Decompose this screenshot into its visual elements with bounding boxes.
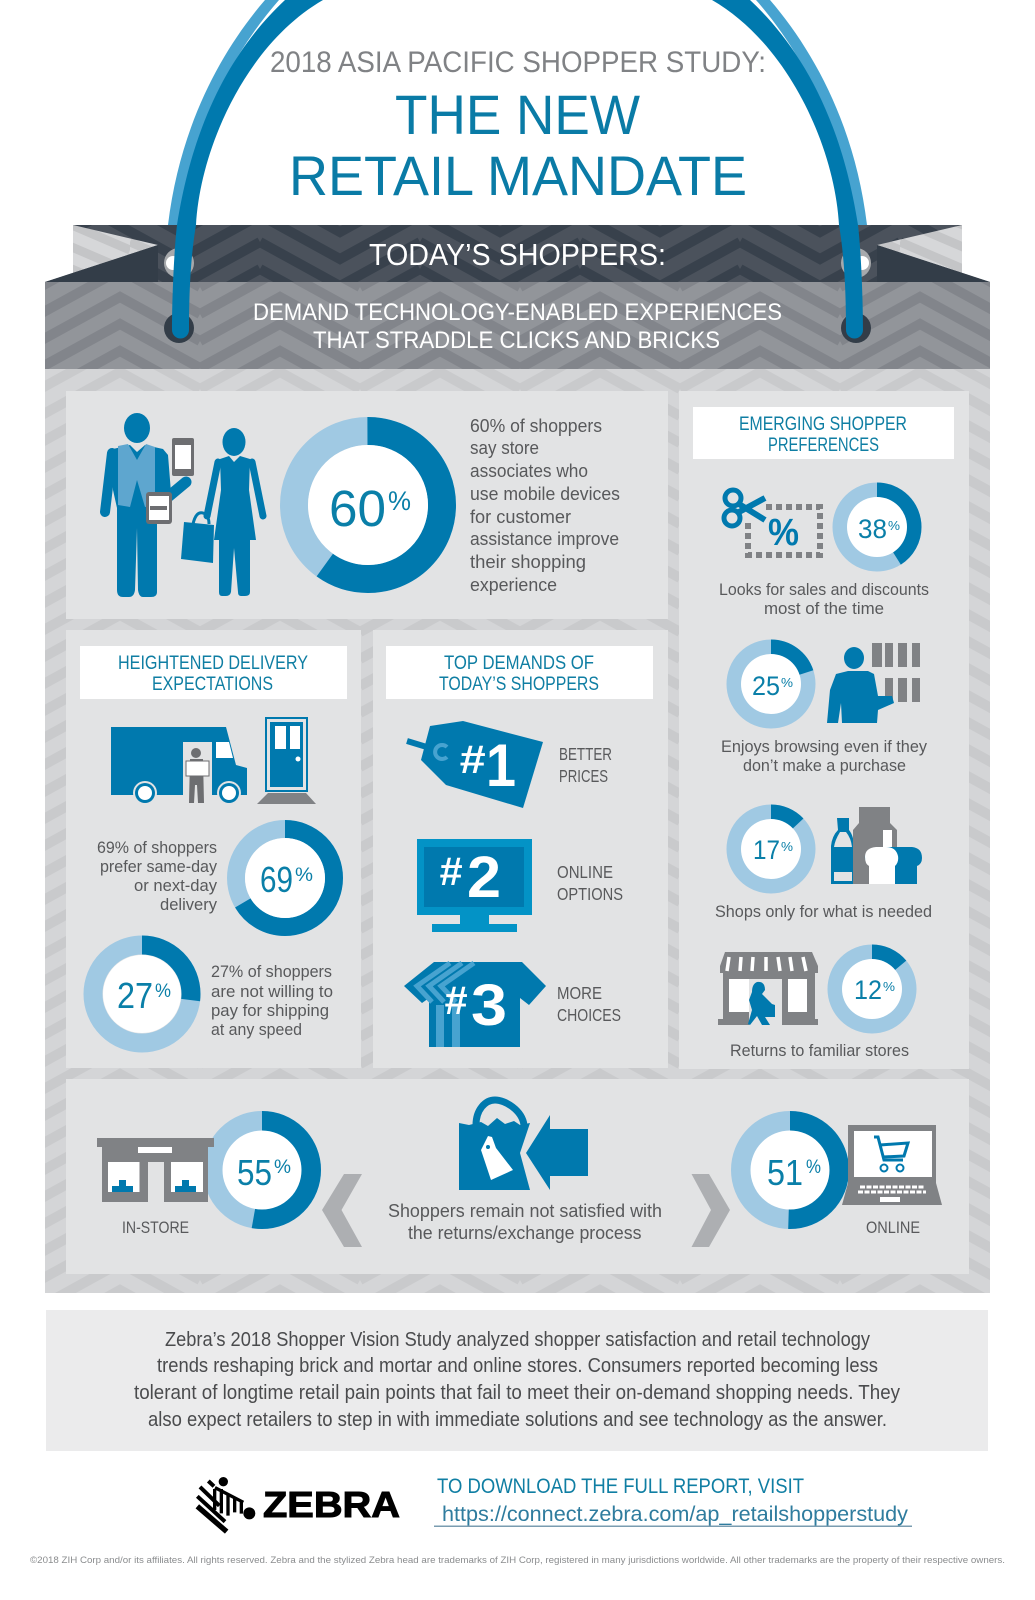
- label: more choices: [557, 983, 621, 1025]
- heading box: HEIGHTENED DELIVERY: [118, 653, 308, 674]
- heading box: TOP DEMANDS OF: [444, 653, 594, 674]
- icon: physical store: [97, 1138, 214, 1202]
- arrow: left chevron: [322, 1174, 362, 1247]
- text: sales and discounts: most of the time: [764, 599, 884, 618]
- bag body: [45, 369, 990, 1293]
- bag front band: [45, 282, 990, 369]
- label: better prices: BETTER: [559, 744, 612, 764]
- text: returns caption: the returns/exchange process: [408, 1223, 642, 1243]
- donut chart: 55%: 55: [237, 1152, 272, 1193]
- icon: zebra head: [197, 1477, 255, 1532]
- text: shops only for what is needed: Shops only for what is needed: [715, 902, 932, 921]
- summary text: Zebra’s 2018 Shopper Vision Study analyzed shopper satisfaction and retail technology: [165, 1329, 870, 1351]
- donut chart: 25%: 25: [752, 671, 780, 701]
- text: 60 percent description: [470, 415, 620, 595]
- grommet: right lower: [841, 313, 871, 343]
- label: better prices: PRICES: [559, 766, 608, 786]
- label: online options: [557, 862, 623, 904]
- wordmark: ZEBRA: [263, 1484, 400, 1525]
- text: 60 percent description: their shopping: [470, 551, 586, 572]
- summary text: also expect retailers to step in with immediate solutions and see technology as the answer.: [148, 1409, 887, 1431]
- icon: laptop with cart: [842, 1125, 942, 1205]
- icon: delivery truck: [111, 727, 247, 805]
- donut chart: 12%: 12: [854, 975, 882, 1005]
- donut chart: 38%: 38: [858, 514, 887, 544]
- donut chart: 25%: %: [781, 675, 793, 690]
- donut chart: 51%: [741, 1121, 839, 1219]
- label: more choices: MORE: [557, 983, 602, 1003]
- donut chart: 38%: %: [888, 518, 900, 533]
- label: in-store: IN-STORE: [122, 1218, 189, 1237]
- panel: top demands: [373, 630, 668, 1068]
- label: online options: OPTIONS: [557, 884, 623, 904]
- text: sales and discounts: Looks for sales and discounts: [719, 580, 929, 599]
- panel: emerging shopper preferences: [679, 391, 969, 1069]
- donut chart: 12%: %: [883, 979, 895, 994]
- bag fold: left shadow: [45, 245, 158, 282]
- text: browsing: don’t make a purchase: [743, 756, 906, 775]
- donut chart: 25%: [734, 647, 808, 721]
- grommet: left upper: [164, 248, 194, 278]
- sub heading: DEMAND TECHNOLOGY-ENABLED EXPERIENCES: [253, 299, 782, 326]
- heading box: [693, 407, 954, 459]
- text: 27 percent: at any speed: [211, 1020, 302, 1039]
- arrow: right chevron: [692, 1174, 730, 1247]
- icon: door with mat: [257, 717, 316, 804]
- summary text: tolerant of longtime retail pain points that fail to meet their on-demand shopping needs. They: [134, 1382, 900, 1404]
- text: 27 percent: are not willing to: [211, 982, 333, 1001]
- donut chart: 55%: [213, 1121, 311, 1219]
- handle: front right strap: [712, 0, 863, 338]
- label: online: ONLINE: [866, 1218, 920, 1237]
- summary text: [134, 1329, 900, 1431]
- text: 69 percent: prefer same-day: [100, 857, 217, 876]
- handle: back right strap: [756, 0, 867, 225]
- text: 69 percent: delivery: [160, 895, 217, 914]
- text: browsing: [721, 737, 927, 775]
- icon: groceries: [831, 807, 922, 884]
- icon: price tag #1: [407, 721, 543, 808]
- text: 60 percent description: 60% of shoppers: [470, 415, 602, 436]
- text: 60 percent description: say store: [470, 437, 539, 458]
- panel: returns and exchange: [66, 1079, 969, 1274]
- icon: monitor #2: 2: [467, 845, 501, 910]
- donut chart: 51%: 51: [767, 1152, 803, 1193]
- text: 69 percent: [97, 838, 217, 914]
- icon: price tag #1: #: [459, 738, 486, 782]
- donut chart: 60%: %: [388, 486, 411, 516]
- donut chart: 69%: %: [295, 865, 313, 886]
- heading box: TODAY’S SHOPPERS: [439, 674, 599, 695]
- text: 60 percent description: assistance improve: [470, 528, 619, 549]
- label: more choices: CHOICES: [557, 1005, 621, 1025]
- heading box: [386, 646, 653, 699]
- donut chart: 17%: [734, 812, 808, 886]
- handle: front left strap: [172, 0, 323, 338]
- today's shoppers heading: TODAY’S SHOPPERS:: [369, 237, 666, 272]
- heading box: PREFERENCES: [768, 435, 879, 456]
- text: 69 percent: or next-day: [134, 876, 217, 895]
- text: 60 percent description: use mobile devices: [470, 483, 620, 504]
- sub heading: [253, 299, 782, 354]
- grommet: left lower: [164, 313, 194, 343]
- donut chart: 51%: %: [806, 1157, 821, 1178]
- label: online options: ONLINE: [557, 862, 613, 882]
- text: returns caption: Shoppers remain not satisfied with: [388, 1201, 662, 1221]
- icon: shirt #3: [404, 962, 546, 1047]
- label: better prices: [559, 744, 612, 786]
- donut chart: 12%: [835, 952, 909, 1026]
- summary text: trends reshaping brick and mortar and online stores. Consumers reported becoming less: [157, 1355, 878, 1377]
- donut chart: 69%: [236, 829, 334, 927]
- donut chart: 17%: %: [781, 839, 793, 854]
- donut chart: 60%: 60: [329, 480, 386, 537]
- main title line 2: RETAIL MANDATE: [289, 144, 747, 207]
- heading box: EMERGING SHOPPER: [739, 414, 907, 435]
- call to action: [434, 1475, 912, 1527]
- text: returns caption: [388, 1201, 662, 1243]
- panel: study summary: [46, 1310, 988, 1451]
- bag fold: back flaps: [73, 225, 962, 283]
- handle: back left strap: [168, 0, 279, 225]
- text: 27 percent: [211, 962, 333, 1039]
- text: 27 percent: pay for shipping: [211, 1001, 329, 1020]
- bag fold: right shadow: [877, 245, 990, 282]
- bag fold: dark patterned band: [45, 225, 990, 282]
- text: sales and discounts: [719, 580, 929, 618]
- icon: coupon with scissors: [724, 490, 820, 555]
- icon: coupon with scissors: %: [768, 512, 799, 554]
- donut chart: 27%: 27: [117, 975, 153, 1016]
- donut chart: 17%: 17: [753, 835, 780, 865]
- donut chart: 60%: [294, 431, 442, 579]
- icon: shirt #3: #: [444, 979, 468, 1023]
- panel: heightened delivery expectations: [66, 630, 361, 1068]
- donut chart: 27%: [93, 945, 191, 1043]
- sub heading: THAT STRADDLE CLICKS AND BRICKS: [313, 327, 720, 354]
- copyright footer: ©2018 ZIH Corp and/or its affiliates. All rights reserved. Zebra and the stylized Zebra head are trademarks of ZIH Corp, registered in many jurisdictions worldwide. All other trademarks are the property of their respective owners.: [30, 1555, 1005, 1566]
- icon: browsing shopper: [827, 643, 920, 723]
- logo: Zebra: [197, 1477, 400, 1532]
- main title line 1: THE NEW: [395, 83, 640, 146]
- text: returns to familiar stores: Returns to familiar stores: [730, 1041, 909, 1060]
- heading box: [80, 646, 347, 699]
- download url: https://connect.zebra.com/ap_retailshopperstudy: [442, 1503, 909, 1526]
- text: 27 percent: 27% of shoppers: [211, 962, 332, 981]
- icon: monitor #2: #: [439, 850, 463, 894]
- donut chart: 69%: 69: [260, 859, 293, 900]
- heading box: EXPECTATIONS: [152, 674, 273, 695]
- text: 60 percent description: experience: [470, 574, 557, 595]
- text: 69 percent: 69% of shoppers: [97, 838, 217, 857]
- icon: store with shopper: [718, 952, 818, 1025]
- title block: [270, 46, 766, 207]
- text: 60 percent description: associates who: [470, 460, 588, 481]
- download label: TO DOWNLOAD THE FULL REPORT, VISIT: [437, 1475, 804, 1498]
- grommet: right upper: [841, 248, 871, 278]
- panel: 60 percent store associates: [66, 391, 668, 619]
- icon: bag with return arrow: [459, 1100, 588, 1190]
- icon: monitor #2: [417, 839, 532, 932]
- donut chart: 27%: %: [155, 981, 171, 1002]
- icon: price tag #1: 1: [486, 732, 516, 799]
- icon: shirt #3: 3: [471, 973, 507, 1038]
- text: browsing: Enjoys browsing even if they: [721, 737, 927, 756]
- donut chart: 55%: %: [274, 1157, 291, 1178]
- text: 60 percent description: for customer: [470, 506, 571, 527]
- donut chart: 38%: [840, 490, 914, 564]
- icon: associate and shopper: [105, 413, 263, 597]
- study label: 2018 ASIA PACIFIC SHOPPER STUDY:: [270, 46, 766, 79]
